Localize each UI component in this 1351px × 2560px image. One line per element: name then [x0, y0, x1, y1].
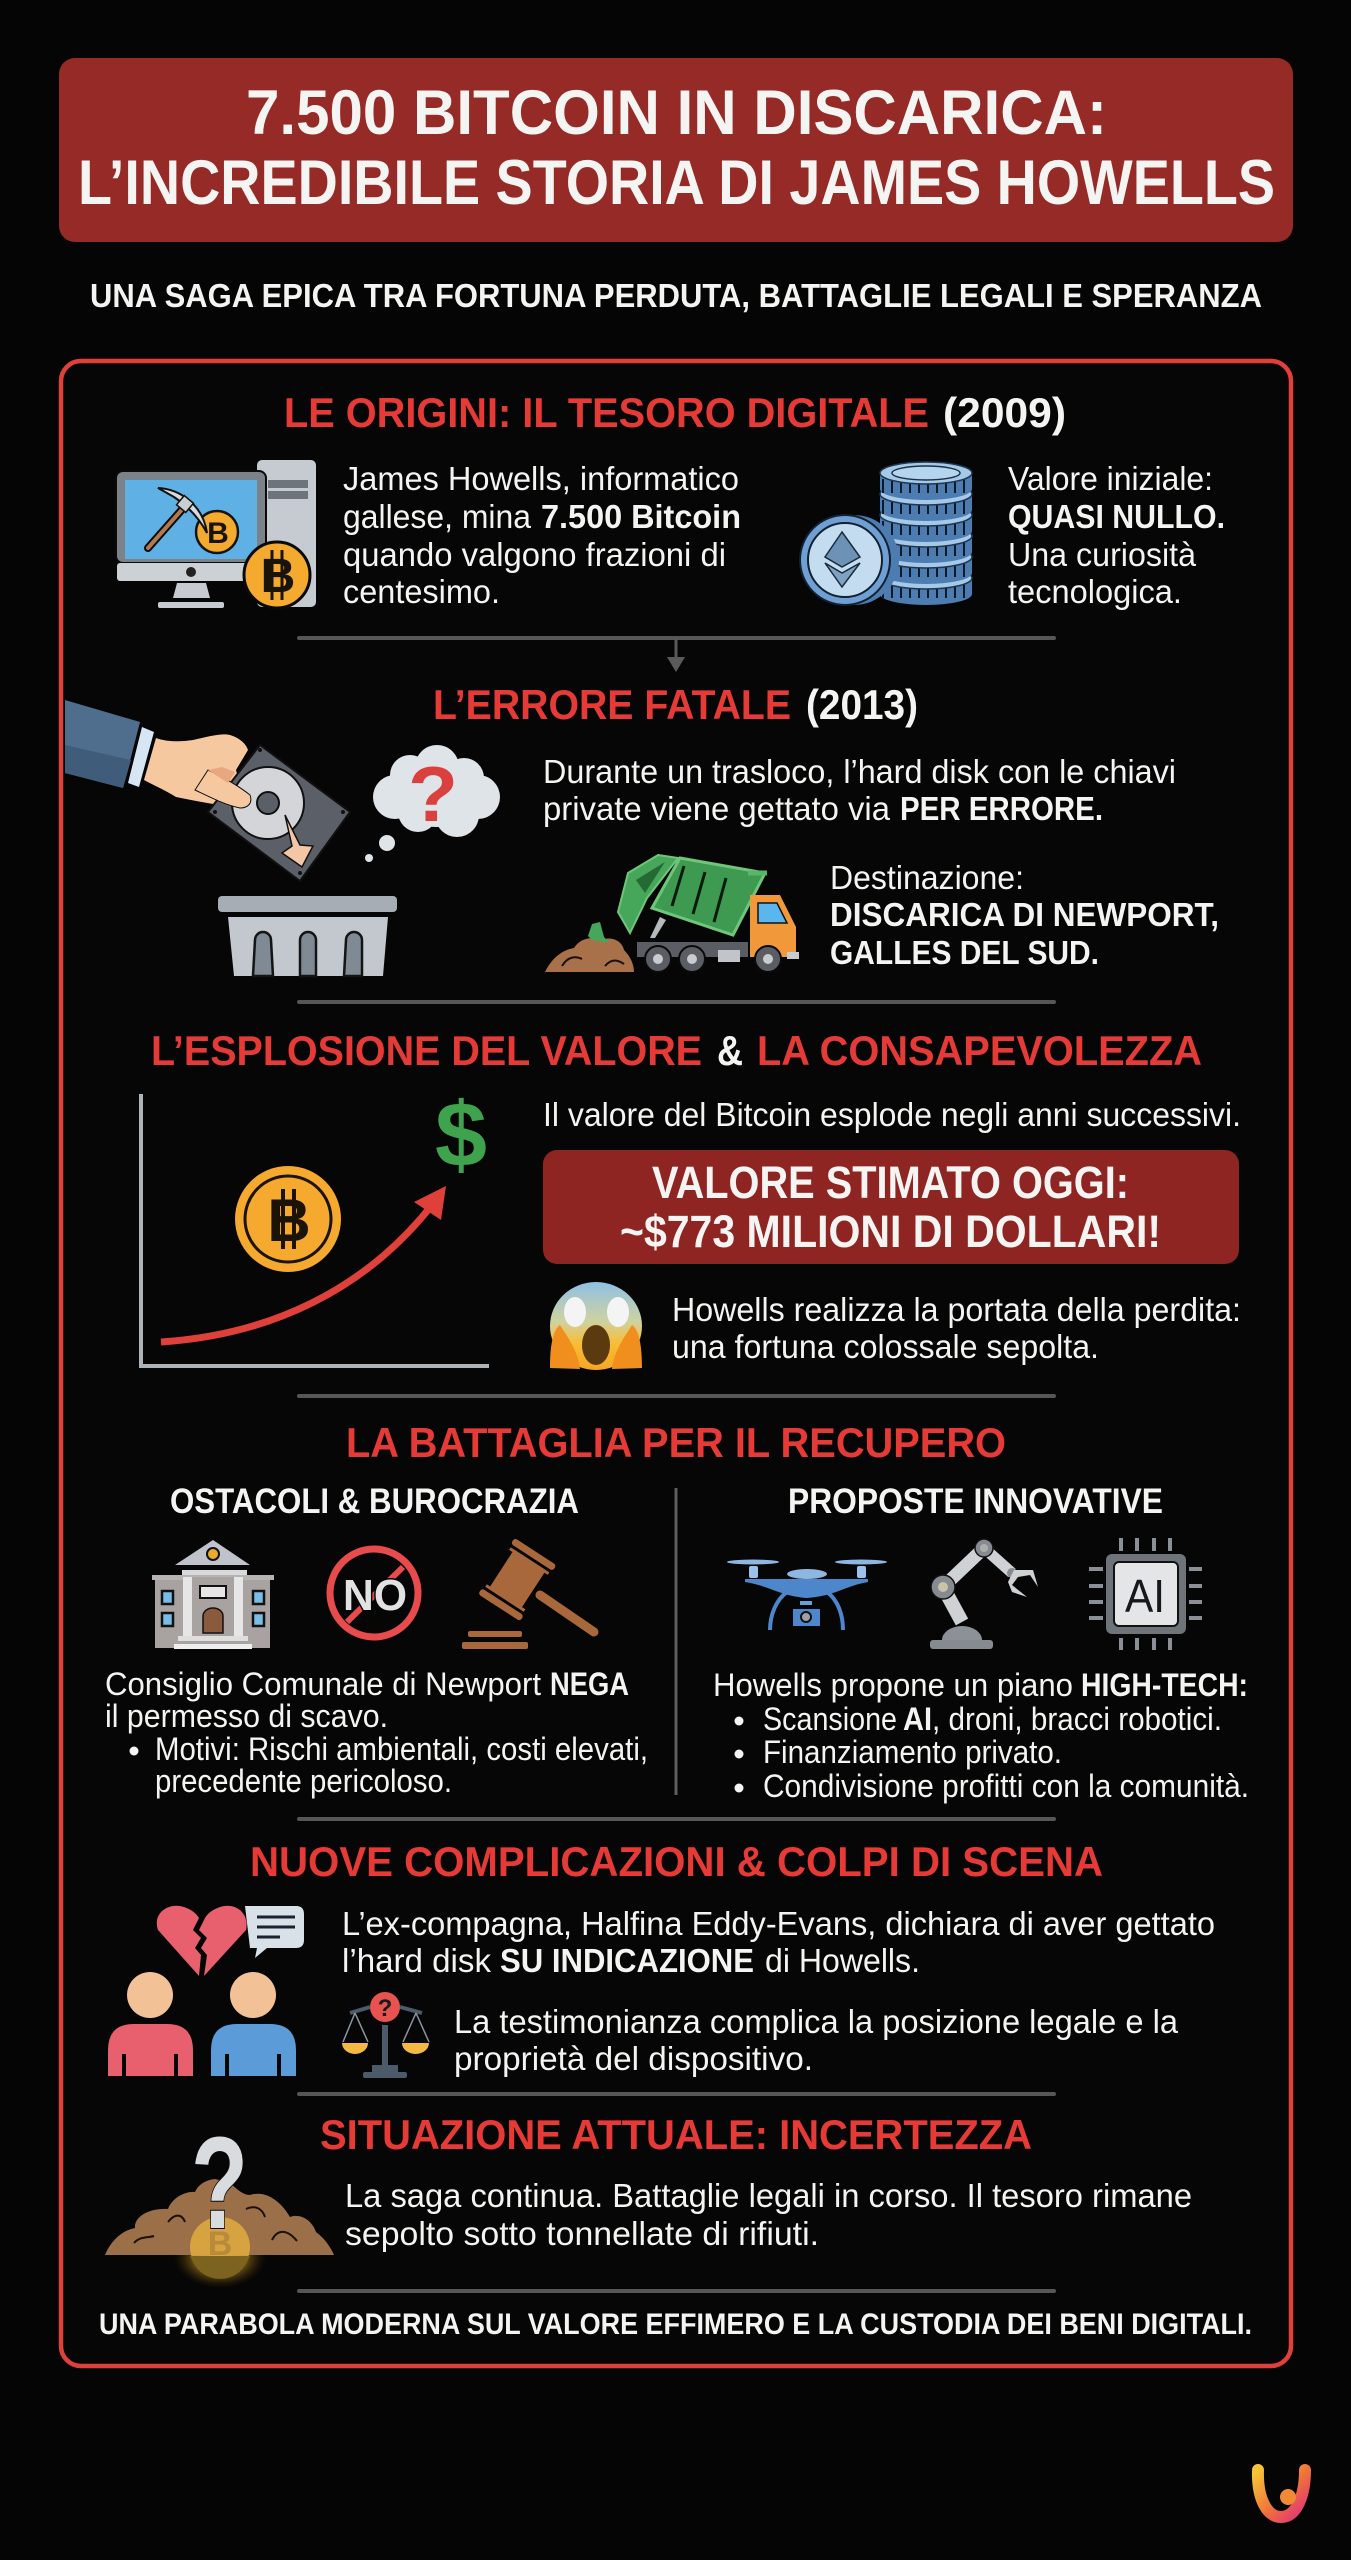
- text: destinazione: [830, 859, 1219, 971]
- text: valore esplode: Il valore del Bitcoin esplode negli anni successivi.: [543, 1096, 1241, 1133]
- chart: bitcoin value growth: B: [267, 1187, 311, 1254]
- text: durante un trasloco: private viene gettato via: [543, 790, 891, 827]
- icon: scales with question mark: [342, 1992, 429, 2078]
- text: consiglio comunale: Motivi: Rischi ambientali, costi elevati,: [155, 1731, 648, 1767]
- icon: screaming face: [550, 1282, 642, 1370]
- text: testimonianza: [454, 2003, 1179, 2077]
- text: destinazione: GALLES DEL SUD.: [830, 934, 1099, 971]
- icon: dump truck: [545, 855, 799, 972]
- text: piano high-tech: HIGH-TECH:: [1081, 1667, 1248, 1703]
- heading: esplosione del valore: LA CONSAPEVOLEZZA: [757, 1027, 1202, 1074]
- icon: hand dropping hard disk: [65, 700, 350, 881]
- icon: town hall: [152, 1540, 274, 1649]
- heading: esplosione del valore: &: [717, 1027, 743, 1074]
- footer statement: UNA PARABOLA MODERNA SUL VALORE EFFIMERO E LA CUSTODIA DEI BENI DIGITALI.: [99, 2308, 1252, 2341]
- logo: [1258, 2470, 1305, 2517]
- text: consiglio comunale: precedente pericoloso.: [155, 1763, 452, 1799]
- text: piano high-tech: Finanziamento privato.: [763, 1734, 1062, 1770]
- heading: le origini: (2009): [943, 389, 1066, 436]
- text: James Howells: centesimo.: [343, 573, 500, 610]
- text: la saga continua: [345, 2177, 1192, 2252]
- chart: bitcoin value growth: [141, 1084, 489, 1366]
- heading: proposte innovative: PROPOSTE INNOVATIVE: [788, 1482, 1163, 1521]
- subtitle: UNA SAGA EPICA TRA FORTUNA PERDUTA, BATTAGLIE LEGALI E SPERANZA: [90, 277, 1262, 314]
- text: howells realizza: [672, 1291, 1241, 1365]
- icon: scales with question mark: ?: [378, 1995, 392, 2022]
- text: testimonianza: La testimonianza complica la posizione legale e la: [454, 2003, 1179, 2040]
- heading: nuove complicazioni: NUOVE COMPLICAZIONI & COLPI DI SCENA: [250, 1838, 1103, 1885]
- text: ex-compagna: [342, 1905, 1215, 1979]
- text: testimonianza: proprietà del dispositivo.: [454, 2040, 813, 2077]
- text: destinazione: Destinazione:: [830, 859, 1024, 896]
- text: consiglio comunale: il permesso di scavo.: [105, 1698, 388, 1734]
- text: James Howells: James Howells, informatico: [343, 460, 739, 497]
- text: James Howells: gallese, mina: [343, 498, 532, 535]
- icon: buried bitcoin in mound: B: [208, 2225, 232, 2263]
- text: howells realizza: una fortuna colossale sepolta.: [672, 1328, 1099, 1365]
- text: la saga continua: sepolto sotto tonnellate di rifiuti.: [345, 2215, 819, 2252]
- icon: thought cloud: [365, 745, 500, 862]
- heading: errore fatale: (2013): [806, 681, 918, 728]
- heading: situazione attuale: SITUAZIONE ATTUALE: INCERTEZZA: [320, 2111, 1032, 2158]
- text: consiglio comunale: Consiglio Comunale di Newport: [105, 1666, 541, 1702]
- heading: battaglia per il recupero: LA BATTAGLIA PER IL RECUPERO: [346, 1419, 1006, 1466]
- heading: ostacoli e burocrazia: OSTACOLI & BUROCRAZIA: [170, 1482, 579, 1521]
- text: valore iniziale: QUASI NULLO.: [1008, 498, 1225, 535]
- icon: separated couple: [108, 1906, 304, 2076]
- icon: buried bitcoin in mound: ?: [191, 2109, 248, 2256]
- text: durante un trasloco: Durante un trasloco, l’hard disk con le chiavi: [543, 753, 1176, 790]
- callout: valore stimato: VALORE STIMATO OGGI:: [652, 1157, 1129, 1208]
- icon: gavel: [462, 1538, 594, 1649]
- icon: computer mining bitcoin: [115, 460, 316, 608]
- heading: errore fatale: L’ERRORE FATALE: [433, 681, 791, 728]
- callout: valore stimato: ~$773 MILIONI DI DOLLARI!: [620, 1206, 1161, 1257]
- arrow: down: [667, 638, 685, 672]
- icon: trash bin: [218, 896, 397, 976]
- icon: robot arm: [930, 1539, 1038, 1649]
- text: ex-compagna: di Howells.: [765, 1942, 920, 1979]
- text: piano high-tech: Howells propone un piano: [713, 1667, 1073, 1703]
- icon: AI chip: AI: [1125, 1570, 1165, 1622]
- text: piano high-tech: Condivisione profitti con la comunità.: [763, 1768, 1249, 1804]
- text: James Howells: [343, 460, 741, 610]
- title banner: [59, 58, 1293, 242]
- icon: AI chip: [1089, 1538, 1202, 1650]
- chart: bitcoin value growth: $: [435, 1084, 487, 1186]
- panel: main frame: [61, 361, 1291, 2366]
- icon: computer mining bitcoin: B: [207, 517, 229, 550]
- text: James Howells: 7.500 Bitcoin: [541, 498, 741, 535]
- text: consiglio comunale: NEGA: [550, 1666, 629, 1702]
- text: piano high-tech: , droni, bracci robotici.: [932, 1701, 1222, 1737]
- text: valore iniziale: tecnologica.: [1008, 573, 1182, 610]
- icon: computer mining bitcoin: B: [261, 550, 295, 603]
- text: ex-compagna: SU INDICAZIONE: [500, 1942, 754, 1979]
- heading: esplosione del valore: [151, 1027, 1202, 1074]
- text: piano high-tech: [713, 1667, 1249, 1804]
- text: durante un trasloco: PER ERRORE.: [900, 790, 1103, 827]
- text: consiglio comunale: [105, 1666, 648, 1799]
- text: ex-compagna: L’ex-compagna, Halfina Eddy-Evans, dichiara di aver gettato: [342, 1905, 1215, 1942]
- text: durante un trasloco: [543, 753, 1176, 827]
- text: ex-compagna: l’hard disk: [342, 1942, 491, 1979]
- text: valore iniziale: Valore iniziale:: [1008, 460, 1213, 497]
- icon: no sign: NO: [343, 1571, 407, 1620]
- text: destinazione: DISCARICA DI NEWPORT,: [830, 896, 1219, 933]
- icon: thought cloud: ?: [408, 750, 458, 838]
- heading: le origini: LE ORIGINI: IL TESORO DIGITALE: [284, 389, 929, 436]
- text: piano high-tech: Scansione: [763, 1701, 897, 1737]
- title banner: 7.500 BITCOIN IN DISCARICA:: [246, 78, 1107, 148]
- icon: drone: [727, 1560, 887, 1630]
- icon: no sign: [330, 1549, 418, 1637]
- text: valore iniziale: [1008, 460, 1225, 610]
- text: James Howells: quando valgono frazioni di: [343, 536, 726, 573]
- text: howells realizza: Howells realizza la portata della perdita:: [672, 1291, 1241, 1328]
- text: piano high-tech: AI: [903, 1701, 932, 1737]
- icon: buried bitcoin in mound: [105, 2109, 334, 2288]
- icon: coin stack: [800, 462, 972, 605]
- text: la saga continua: La saga continua. Battaglie legali in corso. Il tesoro rimane: [345, 2177, 1192, 2214]
- heading: esplosione del valore: L’ESPLOSIONE DEL VALORE: [151, 1027, 702, 1074]
- text: valore iniziale: Una curiosità: [1008, 536, 1197, 573]
- callout: valore stimato: [543, 1150, 1239, 1264]
